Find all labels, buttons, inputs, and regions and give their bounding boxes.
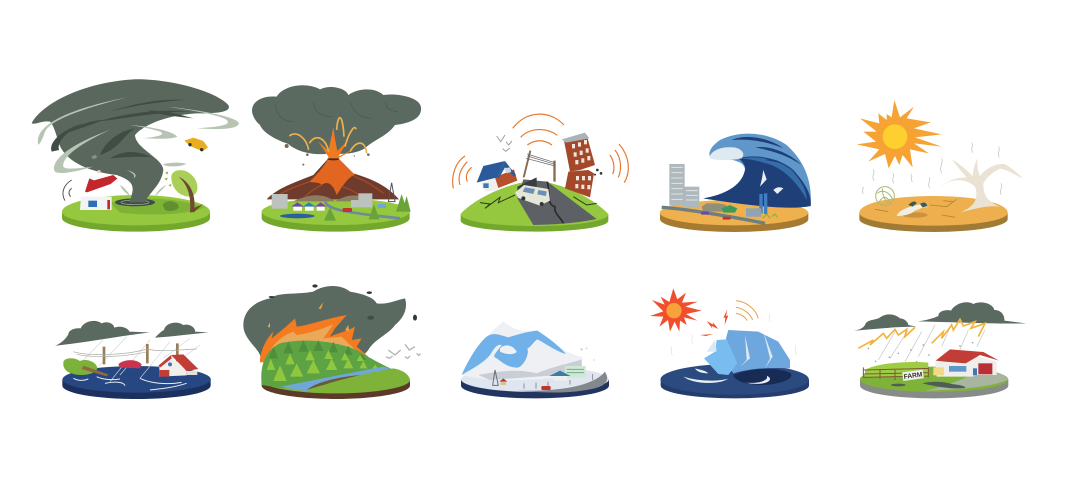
- hailstones: [867, 342, 973, 362]
- water ripples: [73, 377, 187, 390]
- mountain house and tower: [493, 370, 507, 385]
- panel: drought: [857, 100, 1023, 232]
- disc: raised grass hill: [461, 181, 608, 232]
- farmhouse: [933, 349, 999, 377]
- heat wisps: [862, 143, 1002, 195]
- flying rocks: [285, 144, 370, 166]
- street lamps: [524, 374, 593, 389]
- gray buildings: [272, 193, 372, 209]
- mountain: [267, 158, 399, 199]
- disc: soil platform: [261, 367, 410, 399]
- smoke cloud: [243, 286, 406, 366]
- flames: [260, 315, 368, 362]
- lava fountain: [289, 118, 367, 158]
- disc: dry earth: [859, 196, 1008, 232]
- small houses: [291, 202, 386, 211]
- panel: wildfire: [243, 284, 421, 399]
- flying yellow car: [184, 138, 208, 151]
- orange shock waves: [453, 114, 628, 188]
- ground crack: [480, 195, 597, 208]
- utility poles: [523, 151, 556, 182]
- disc: sand platform: [660, 200, 808, 232]
- ice highlights: [707, 332, 773, 368]
- birds: [497, 135, 512, 151]
- panel: iceberg: [650, 288, 809, 398]
- beach houses: [702, 203, 761, 217]
- fallen tree: [63, 358, 108, 376]
- crop field: [865, 362, 928, 377]
- red car: [541, 386, 551, 390]
- river: [281, 367, 390, 391]
- leaning brick tower: [562, 133, 595, 197]
- panel: flood: [55, 321, 211, 399]
- lightning bolts: [858, 319, 985, 348]
- blue towers in wave: [759, 193, 767, 214]
- crater: [327, 158, 339, 160]
- road: [325, 202, 400, 218]
- wind lines: [63, 180, 72, 201]
- dark ash specks: [269, 284, 417, 321]
- embers: [268, 302, 349, 332]
- tornado cloud and funnel: [32, 79, 229, 202]
- disc: gray platform: [860, 367, 1008, 398]
- radio tower: [388, 183, 395, 202]
- flooded house: [158, 354, 198, 377]
- panel: earthquake: [453, 114, 628, 232]
- whirlpool: [683, 368, 791, 385]
- tornado base ring: [115, 198, 155, 206]
- disc: ocean: [660, 364, 809, 398]
- pine trees: [324, 194, 411, 221]
- dead tree: [938, 158, 1023, 213]
- storm clouds: [55, 321, 208, 346]
- red car: [343, 208, 352, 212]
- snow slide: [478, 359, 582, 380]
- house: white with blue window: [80, 197, 112, 210]
- lava flow: [280, 158, 383, 197]
- disc: navy platform: [461, 367, 609, 398]
- steam wisps: [671, 313, 797, 355]
- utility poles and wires: [73, 343, 197, 364]
- animal skull: [897, 202, 928, 218]
- disc: flood water: [62, 366, 211, 399]
- iceberg large: [725, 330, 790, 373]
- forest hillside: [261, 340, 392, 388]
- panel: hail farm: [854, 302, 1026, 398]
- road: [517, 372, 607, 393]
- orange sound arcs: [736, 301, 758, 321]
- panel: avalanche: [461, 322, 609, 398]
- iceberg small front: [704, 339, 737, 375]
- giant wave: [703, 134, 811, 208]
- dark funnel streaks: [51, 100, 193, 158]
- wooden fence: [863, 367, 928, 380]
- grass foreground: [312, 368, 410, 392]
- white van: [515, 185, 550, 206]
- muddy river bank: [307, 375, 360, 390]
- skyscrapers: [669, 164, 699, 207]
- bent tree: [171, 170, 203, 213]
- tilted house: [477, 161, 517, 192]
- cars: [701, 212, 731, 220]
- submerged pink car: [118, 360, 142, 368]
- lower slope: [293, 195, 372, 201]
- panel: volcano: [252, 85, 421, 232]
- bush: [163, 201, 179, 211]
- debris: [92, 155, 171, 187]
- flying red roof: [85, 175, 117, 192]
- cracked road: [517, 177, 597, 225]
- disc: grass platform: [62, 195, 210, 232]
- disc: grass platform: [262, 198, 410, 232]
- rain lines: [878, 323, 985, 362]
- falling bricks: [594, 169, 602, 176]
- flying birds: [386, 344, 421, 358]
- light wind swirls: [38, 97, 239, 197]
- ash cloud: [252, 85, 421, 154]
- snow flecks: [517, 347, 595, 374]
- tumbleweed: [876, 187, 894, 205]
- town buildings: [549, 366, 586, 381]
- snowy mountain: [462, 322, 582, 380]
- farm sign: FARM: [903, 371, 923, 381]
- coastal road: [662, 207, 765, 223]
- cracking red bolts: [700, 309, 728, 336]
- palm shrubs: [763, 214, 777, 218]
- blue ice patches: [462, 331, 566, 375]
- snow hole in ice: [500, 345, 517, 354]
- panel: tornado: [32, 79, 239, 232]
- panel: tsunami: [660, 134, 811, 232]
- sun: [857, 100, 942, 168]
- red sun: [650, 288, 702, 332]
- lake: [280, 214, 315, 218]
- rain lines: [83, 337, 200, 382]
- ground cracks: [875, 199, 997, 217]
- dark puddles: [891, 382, 965, 388]
- storm clouds: [854, 302, 1026, 331]
- lifted debris in wave: [760, 170, 783, 194]
